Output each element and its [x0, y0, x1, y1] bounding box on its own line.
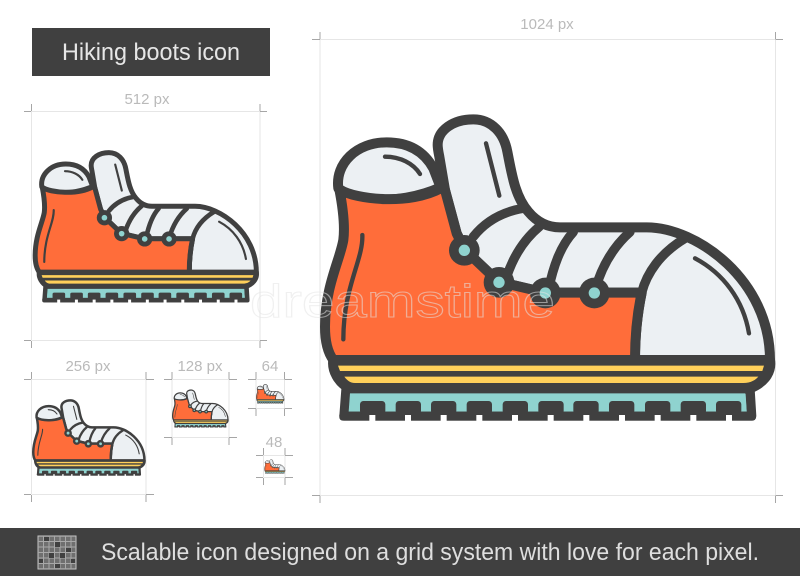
panel: 1024 px icon [312, 16, 783, 503]
icon: boot 48 [264, 460, 285, 474]
watermark: dreamstime [250, 275, 555, 327]
panel: 512 px icon [24, 91, 267, 348]
panel: 256 px icon [24, 358, 154, 502]
size label: 512 px: 512 px [124, 91, 170, 108]
icon: boot large [325, 119, 770, 422]
icon: boot 256 [33, 400, 145, 476]
panel: 48 px icon [256, 434, 293, 485]
size label: 256 px: 256 px [65, 358, 111, 375]
size label: 1024 px: 1024 px [520, 16, 574, 33]
size label: 64: 64 [262, 358, 278, 375]
panel: 64 px icon [248, 358, 292, 416]
panel: 128 px icon [164, 358, 237, 445]
icon: boot 128 [173, 390, 228, 428]
title [32, 28, 270, 76]
footer text: Scalable icon designed on a grid system with love for each pixel. [101, 539, 759, 566]
footer bar [0, 528, 800, 576]
icon: pixel grid [38, 536, 76, 569]
title: Hiking boots icon [62, 39, 240, 66]
size label: 128 px: 128 px [177, 358, 223, 375]
size label: 48: 48 [266, 434, 282, 451]
icon: boot 64 [256, 385, 284, 403]
icon: boot 512 [35, 153, 257, 303]
